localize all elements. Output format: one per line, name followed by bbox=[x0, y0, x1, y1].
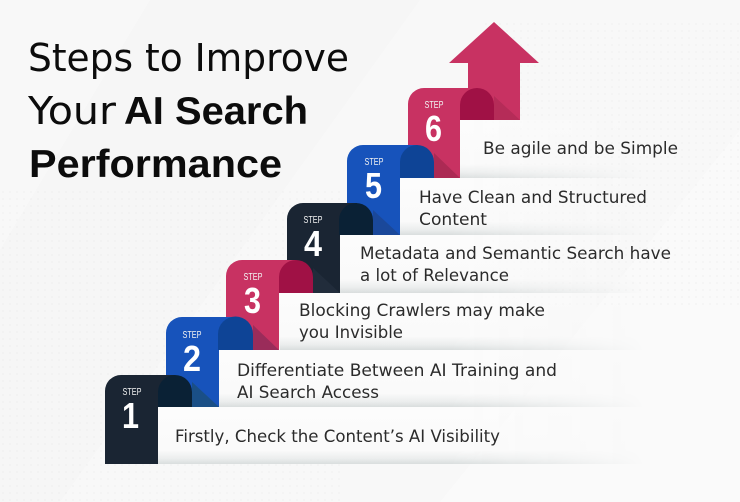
title: Steps to Improve bbox=[28, 36, 349, 80]
step 5 bbox=[347, 145, 670, 235]
text 6: Be agile and be Simple bbox=[483, 139, 678, 158]
step label 6: STEP bbox=[424, 100, 444, 111]
flap 2 bbox=[218, 316, 253, 350]
shadow 2 bbox=[253, 325, 279, 350]
bar 5 bbox=[400, 178, 590, 235]
flap 4 bbox=[339, 203, 373, 235]
text 2: AI Search Access bbox=[237, 383, 379, 402]
title: Performance bbox=[29, 143, 282, 186]
text 2: Differentiate Between AI Training and bbox=[237, 361, 557, 380]
title: AI Search bbox=[124, 90, 308, 133]
step 6 bbox=[408, 88, 690, 178]
flap 3 bbox=[279, 260, 313, 293]
tab 1 bbox=[105, 375, 175, 464]
flap 6 bbox=[460, 88, 494, 120]
text 2 bbox=[237, 361, 557, 402]
tab 5 bbox=[347, 145, 417, 235]
tab 2 bbox=[166, 317, 236, 407]
bar 6 bbox=[460, 122, 590, 178]
tab 3 bbox=[226, 260, 296, 350]
text 5: Have Clean and Structured bbox=[419, 188, 647, 207]
number 6: 6 bbox=[425, 108, 442, 149]
text 3: you Invisible bbox=[299, 323, 403, 342]
step label 4: STEP bbox=[304, 215, 323, 226]
number 2: 2 bbox=[183, 338, 201, 379]
bar 2 bbox=[219, 352, 595, 407]
step label 1: STEP bbox=[122, 387, 142, 398]
tab 4 bbox=[287, 203, 357, 293]
number 5: 5 bbox=[365, 165, 382, 206]
step 4 bbox=[287, 203, 671, 293]
text 5: Content bbox=[419, 210, 488, 229]
step 3 bbox=[226, 260, 595, 350]
number 4: 4 bbox=[304, 223, 322, 264]
text 4: Metadata and Semantic Search have bbox=[360, 244, 671, 263]
flap 5 bbox=[400, 145, 434, 178]
step label 5: STEP bbox=[364, 157, 384, 168]
arrow shadow 6 bbox=[494, 96, 520, 120]
step label 3: STEP bbox=[244, 272, 263, 283]
text 4: a lot of Relevance bbox=[360, 266, 509, 285]
text 4 bbox=[360, 244, 671, 285]
text 3: Blocking Crawlers may make bbox=[299, 301, 545, 320]
shadow 4 bbox=[373, 210, 400, 235]
title: Your bbox=[27, 89, 116, 133]
bar 3 bbox=[280, 296, 595, 350]
bar 4 bbox=[340, 240, 590, 293]
step label 2: STEP bbox=[182, 330, 202, 341]
text 3 bbox=[299, 301, 545, 342]
shadow 3 bbox=[313, 268, 340, 293]
number 1: 1 bbox=[122, 395, 139, 436]
bar 1 bbox=[158, 408, 595, 464]
text 5 bbox=[419, 188, 647, 229]
tab 6 bbox=[408, 88, 477, 178]
title bbox=[27, 36, 349, 186]
shadow 1 bbox=[192, 382, 219, 407]
number 3: 3 bbox=[244, 280, 261, 321]
shadow 5 bbox=[434, 153, 460, 178]
flap 1 bbox=[158, 375, 192, 407]
text 1: Firstly, Check the Content’s AI Visibility bbox=[175, 427, 500, 446]
step 1 bbox=[105, 375, 595, 464]
step 2 bbox=[166, 316, 595, 407]
arrow bbox=[449, 22, 539, 120]
